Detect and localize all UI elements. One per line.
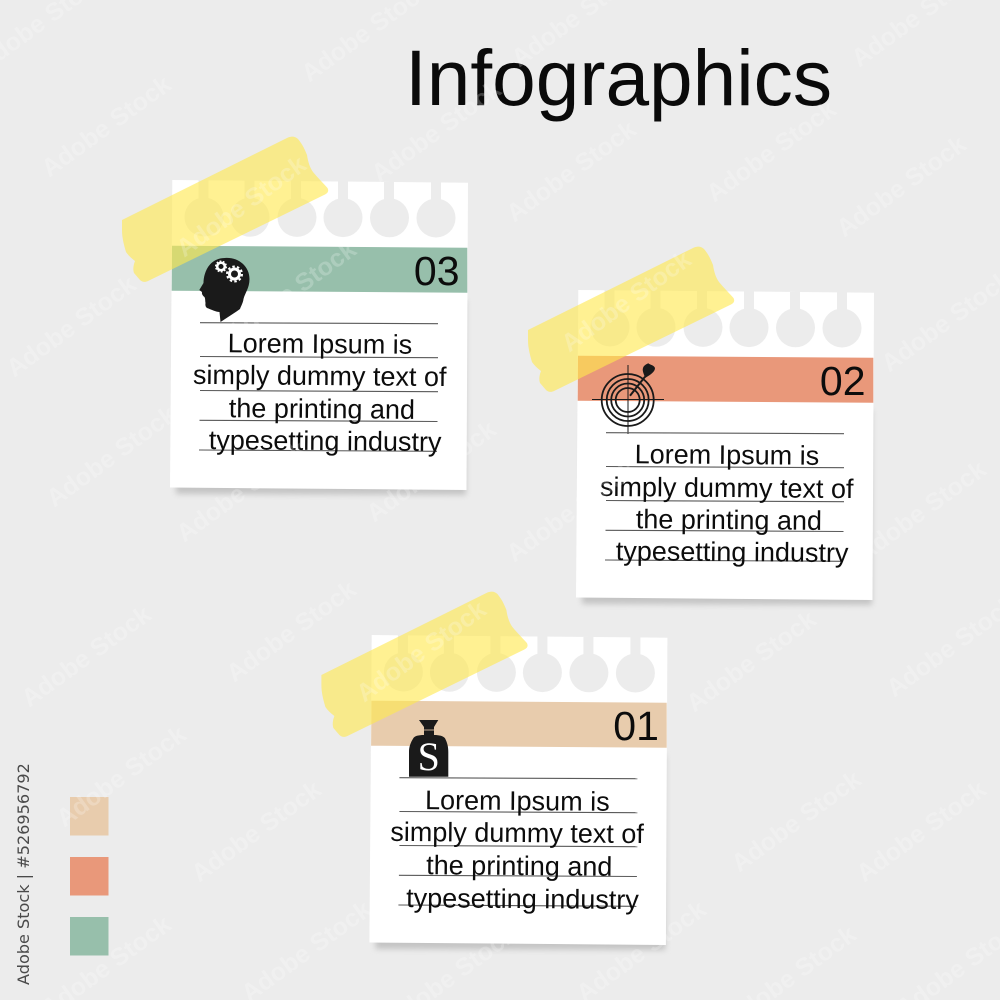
watermarks: Adobe Stock: [831, 130, 971, 243]
tape: [528, 247, 734, 392]
watermarks: Adobe Stock: [366, 75, 506, 188]
watermarks: Adobe Stock: [36, 70, 176, 183]
panel: note 02: [528, 247, 874, 605]
icon: head with gears: [199, 258, 250, 322]
panel: note 03: [122, 137, 468, 495]
title: Infographics: [405, 34, 832, 122]
tape: [321, 592, 528, 737]
watermarks: Adobe Stock: [701, 95, 841, 208]
body text: the printing and: [426, 850, 613, 882]
ruled lines: [199, 323, 438, 451]
body text: simply dummy text of: [193, 360, 447, 392]
body text: Lorem Ipsum is: [228, 328, 412, 360]
colour legend: [70, 797, 108, 956]
watermarks: Adobe Stock: [171, 150, 311, 263]
watermarks: Adobe Stock: [41, 400, 181, 513]
icon: money bag: [409, 720, 448, 779]
colour band 01: [371, 701, 667, 748]
body text: typesetting industry: [209, 425, 442, 457]
ruled lines: [605, 433, 844, 561]
number 03: 03: [414, 248, 460, 294]
body text: [599, 439, 854, 568]
watermarks: Adobe Stock: [171, 435, 311, 548]
body text: the printing and: [636, 504, 822, 536]
watermarks: Adobe Stock: [681, 605, 821, 718]
stock watermark id: Adobe Stock | #526956792: [14, 763, 33, 985]
watermarks: Adobe Stock: [51, 720, 191, 833]
watermarks: Adobe Stock: [726, 765, 866, 878]
watermarks: Adobe Stock: [501, 455, 641, 568]
watermarks: Adobe Stock: [361, 415, 501, 528]
colour band 03: [172, 246, 467, 293]
body text: [390, 785, 645, 915]
body text: simply dummy text of: [390, 817, 644, 849]
number 01: 01: [613, 703, 659, 749]
body text: Lorem Ipsum is: [635, 439, 819, 471]
body text: Lorem Ipsum is: [425, 785, 610, 817]
body text: [192, 328, 447, 457]
watermarks: Adobe Stock: [1, 270, 141, 383]
body text: simply dummy text of: [600, 472, 854, 504]
watermarks: Adobe Stock: [221, 235, 361, 348]
body text: the printing and: [229, 393, 415, 425]
number 02: 02: [820, 358, 866, 404]
ruled lines: [398, 778, 637, 906]
watermarks: Adobe Stock: [16, 600, 156, 713]
body text: typesetting industry: [406, 883, 639, 915]
watermarks: Adobe Stock: [851, 775, 991, 888]
icon: target with dart: [592, 363, 664, 434]
panel: note 01: [321, 592, 667, 950]
icon: money bag: S: [418, 734, 440, 779]
watermarks: Adobe Stock: [351, 595, 491, 708]
tape: [122, 137, 328, 282]
colour band 02: [578, 356, 873, 403]
watermarks: Adobe Stock: [221, 575, 361, 688]
watermarks: Adobe Stock: [186, 775, 326, 888]
watermarks: Adobe Stock: [501, 115, 641, 228]
watermarks: Adobe Stock: [851, 455, 991, 568]
watermarks: Adobe Stock: [556, 245, 696, 358]
body text: typesetting industry: [616, 536, 849, 568]
